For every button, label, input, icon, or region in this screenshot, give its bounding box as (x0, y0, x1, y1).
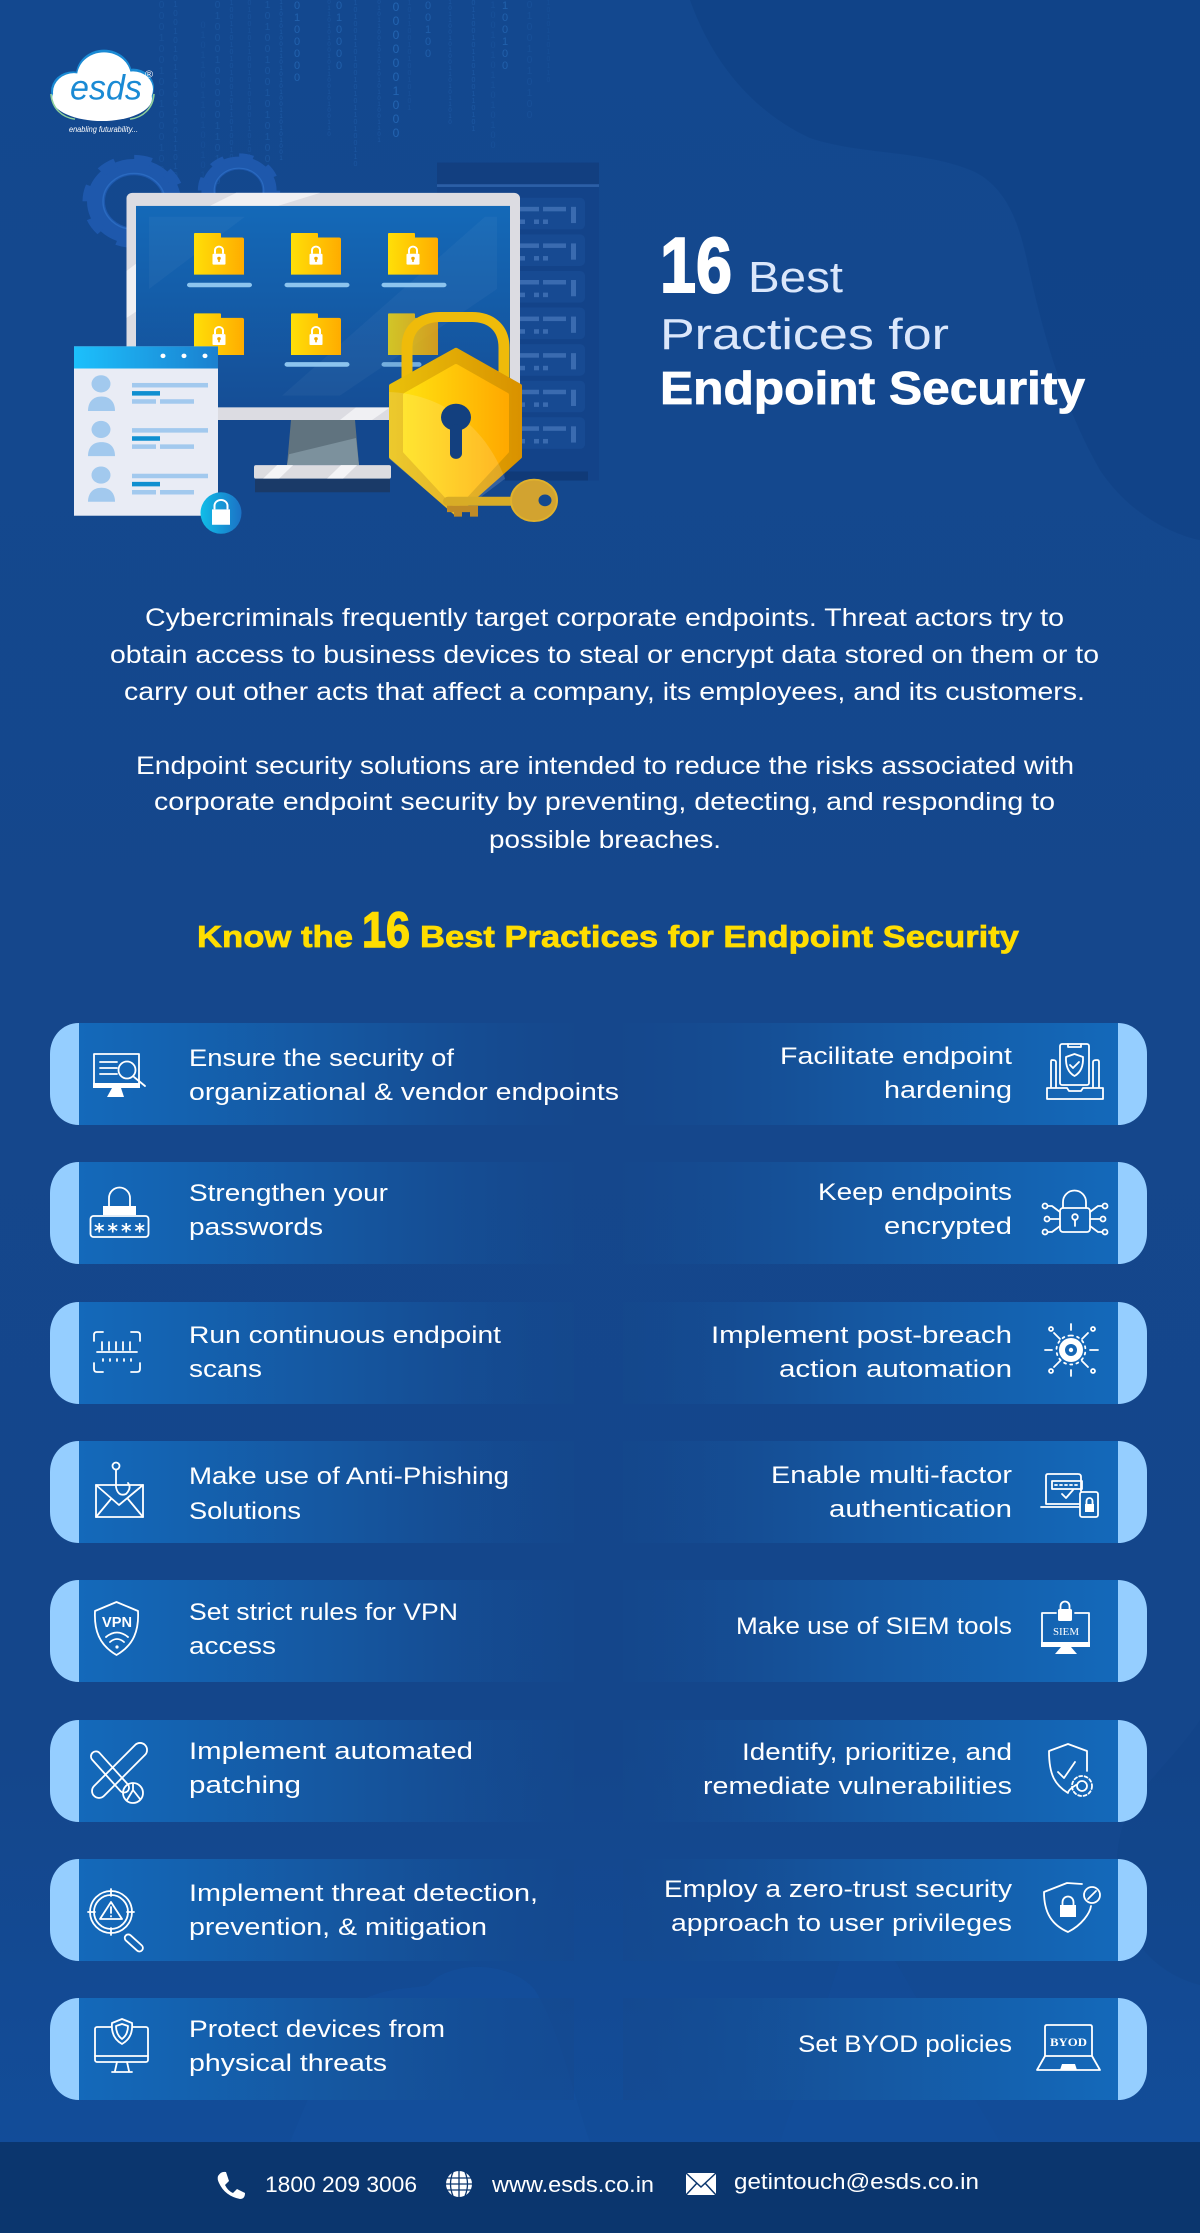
panel: automated patching: Implement automated (189, 1738, 473, 1765)
binary code rain: 01000100000110100 (212, 0, 223, 187)
intro paragraph 2: Endpoint security solutions are intended to reduce the risks associated with (136, 752, 1074, 780)
panel: endpoint hardening: hardening (884, 1077, 1012, 1104)
icon: threat magnifier (88, 1889, 144, 1953)
icon: VPN shield: VPN (102, 1614, 132, 1631)
panel: threat detection: Implement threat detection, (189, 1880, 538, 1907)
icon: shield lock no-entry (1044, 1883, 1100, 1932)
binary code rain: 1001010110001001101001 (171, 0, 180, 198)
panel: organizational and vendor endpoints: organizational & vendor endpoints (189, 1079, 619, 1106)
panel: physical threats: physical threats (189, 2050, 387, 2077)
panel: continuous scans (50, 1302, 574, 1404)
logo: ® (145, 70, 153, 81)
icon: automation gear (1045, 1324, 1098, 1376)
title: Best (748, 253, 843, 302)
intro paragraph 1: obtain access to business devices to steal or encrypt data stored on them or to (110, 641, 1099, 669)
panel: remediate vulnerabilities (623, 1720, 1147, 1822)
panel: physical threats: Protect devices from (189, 2016, 445, 2043)
panel: post-breach automation: action automation (779, 1356, 1012, 1383)
panel: keep endpoints encrypted (623, 1162, 1147, 1264)
binary code rain: 101011010110 (545, 0, 552, 84)
binary code rain: 1011001010010101 (406, 0, 413, 112)
icon: phishing envelope (96, 1462, 143, 1517)
panel: threat detection (50, 1859, 574, 1961)
icon: BYOD laptop: BYOD (1050, 2035, 1087, 2049)
panel: organizational and vendor endpoints: Ensure the security of (189, 1045, 454, 1072)
panel: remediate vulnerabilities: remediate vulnerabilities (703, 1773, 1012, 1800)
icon: lock badge (200, 492, 242, 534)
binary code rain: 00100 (422, 0, 434, 60)
icon: phone shield (1047, 1044, 1103, 1099)
binary code rain: 00010010010001001 (156, 0, 167, 187)
icon: shield with gear (1049, 1744, 1092, 1796)
icon: monitor with magnifier (93, 1054, 145, 1097)
folders with locks (187, 233, 446, 367)
section heading: Know the (197, 919, 353, 954)
panel: keep endpoints encrypted: encrypted (884, 1213, 1012, 1240)
panel: VPN access: Set strict rules for VPN (189, 1599, 458, 1626)
illustration: secure endpoints (74, 157, 599, 534)
intro paragraph 2 (136, 752, 1074, 854)
binary code rain: 010110010101010101001101 (376, 0, 382, 144)
binary code rain: 010000 (333, 0, 345, 72)
section heading: 16 (362, 902, 410, 958)
panel: VPN access: access (189, 1633, 276, 1660)
panel: zero-trust: approach to user privileges (671, 1910, 1012, 1937)
panel: anti-phishing: Solutions (189, 1498, 301, 1525)
binary code rain: 0110010110100110101 (470, 0, 477, 133)
phone number: 1800 209 3006 (265, 2172, 417, 2197)
binary code rain: 0100000 (291, 0, 303, 84)
binary code rain: 101100101001101011010 (447, 0, 453, 126)
icon: laptop and phone (1041, 1474, 1098, 1517)
title: Endpoint Security (660, 362, 1085, 414)
panel: threat detection: prevention, & mitigation (189, 1914, 487, 1941)
icon: circuit lock (1042, 1190, 1108, 1234)
intro paragraph 1 (110, 604, 1099, 706)
logo: enabling futurability... (69, 124, 138, 134)
panel: strengthen passwords: passwords (189, 1214, 323, 1241)
icon: SIEM monitor (1041, 1602, 1090, 1654)
panel: physical threats (50, 1998, 574, 2100)
panel: zero-trust: Employ a zero-trust security (664, 1876, 1013, 1903)
binary code rain: 1010010010101001 (262, 0, 273, 176)
panel: organizational and vendor endpoints (50, 1023, 619, 1125)
panel: VPN access (50, 1580, 574, 1682)
user list window (74, 346, 218, 516)
binary code rain: 110101001101010100110101001 (278, 0, 284, 162)
monitor (126, 193, 520, 492)
panel: post-breach automation (623, 1302, 1147, 1404)
icon: gears (88, 157, 276, 243)
panel: automated patching (50, 1720, 574, 1822)
panel: endpoint hardening: Facilitate endpoint (780, 1043, 1012, 1070)
logo: esds (70, 67, 142, 107)
icon: VPN shield (95, 1602, 138, 1655)
panel: multi-factor authentication: authentication (829, 1496, 1012, 1523)
icon: envelope (686, 2173, 716, 2195)
panel: anti-phishing (50, 1441, 574, 1543)
binary code rain (156, 0, 552, 200)
intro paragraph 1: carry out other acts that affect a company, its employees, and its customers. (124, 678, 1085, 706)
binary code rain: 100101011010100 (488, 0, 498, 150)
panel: strengthen passwords (50, 1162, 574, 1264)
panel: zero-trust (623, 1859, 1147, 1961)
binary code rain: 010110011010010110 (198, 20, 208, 200)
panel: keep endpoints encrypted: Keep endpoints (818, 1179, 1012, 1206)
logo (51, 50, 154, 134)
panel: SIEM tools: Make use of SIEM tools (736, 1613, 1012, 1640)
panel: BYOD policies: Set BYOD policies (798, 2031, 1012, 2058)
icon: golden padlock and key (389, 317, 557, 521)
icon: phone (218, 2172, 245, 2199)
icon: padlock and password (90, 1188, 148, 1243)
title: 16 (660, 221, 732, 309)
panel: post-breach automation: Implement post-breach (711, 1322, 1012, 1349)
panel: continuous scans: scans (189, 1356, 262, 1383)
binary code rain: 0000001000 (389, 0, 403, 140)
binary code rain: 01001010100 (524, 0, 535, 121)
intro paragraph 2: corporate endpoint security by preventing, detecting, and responding to (154, 788, 1055, 816)
icon: globe (446, 2171, 472, 2197)
panel: BYOD policies (623, 1998, 1147, 2100)
panel: anti-phishing: Make use of Anti-Phishing (189, 1463, 509, 1490)
section heading (197, 902, 1020, 958)
icon: SIEM monitor: SIEM (1053, 1626, 1079, 1638)
panel: automated patching: patching (189, 1772, 301, 1799)
panel: multi-factor authentication (623, 1441, 1147, 1543)
intro paragraph 1: Cybercriminals frequently target corporate endpoints. Threat actors try to (145, 604, 1064, 632)
panel: remediate vulnerabilities: Identify, prioritize, and (742, 1739, 1012, 1766)
intro paragraph 2: possible breaches. (489, 826, 721, 854)
panel: endpoint hardening (623, 1023, 1147, 1125)
binary code rain: 010010110010101001101010 (246, 0, 253, 168)
panel: strengthen passwords: Strengthen your (189, 1180, 388, 1207)
panel: multi-factor authentication: Enable multi-factor (771, 1462, 1012, 1489)
binary code rain: 01101010010110010100110 (326, 0, 332, 138)
footer bar (0, 2142, 1200, 2233)
icon: monitor with shield (95, 2019, 148, 2072)
icon: padlock and password: **** (94, 1219, 146, 1243)
icon: barcode scanner (94, 1332, 140, 1372)
panel: SIEM tools (623, 1580, 1147, 1682)
binary code rain: 101001101001010110100110 (352, 0, 359, 168)
binary code rain: 100100 (499, 0, 511, 72)
email: getintouch@esds.co.in (734, 2169, 979, 2194)
website: www.esds.co.in (491, 2172, 654, 2197)
icon: bandage and wrench (89, 1740, 150, 1803)
panel: continuous scans: Run continuous endpoint (189, 1322, 501, 1349)
title (660, 221, 1085, 414)
server rack (437, 163, 599, 481)
binary code rain: 100110101010010110100101 (228, 0, 235, 168)
title: Practices for (660, 310, 949, 359)
section heading: Best Practices for Endpoint Security (420, 919, 1020, 954)
icon: BYOD laptop (1037, 2025, 1100, 2070)
